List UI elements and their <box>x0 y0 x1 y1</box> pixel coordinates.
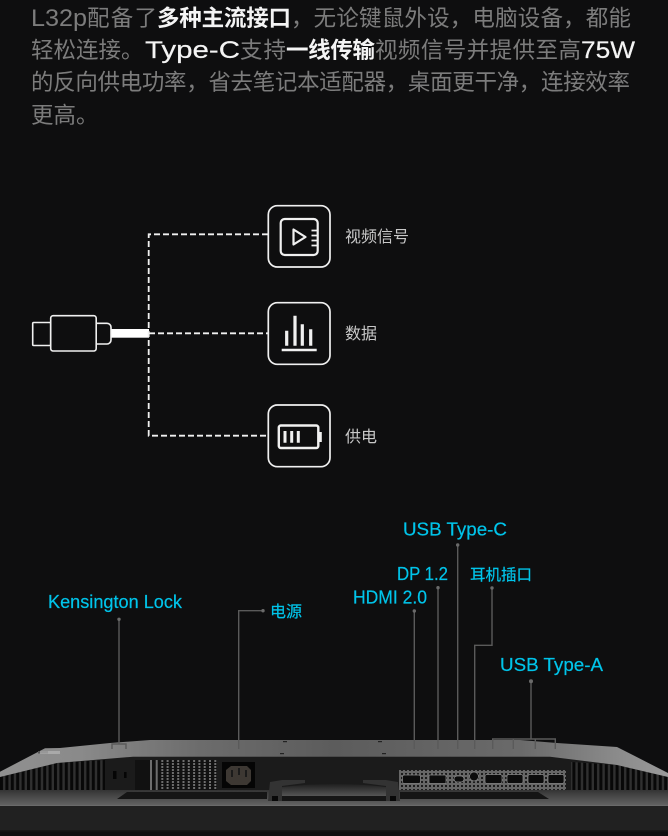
leader lines <box>112 545 555 749</box>
leader: headphone <box>475 588 492 749</box>
port labels: USB Type-C <box>403 518 507 540</box>
intro paragraph: 的反向供电功率，省去笔记本适配器，桌面更干净，连接效率 <box>31 70 630 95</box>
intro paragraph <box>31 5 635 128</box>
port labels: 耳机插口 <box>470 566 532 584</box>
intro paragraph: 多种主流接口 <box>157 6 291 31</box>
cable <box>112 329 149 338</box>
leader end dots <box>117 543 533 683</box>
intro paragraph: 一线传输 <box>286 38 375 63</box>
intro paragraph: 配备了 <box>87 6 157 31</box>
monitor rear lower body <box>0 805 668 830</box>
centre vents <box>135 760 217 790</box>
dashed connectors <box>149 234 268 436</box>
intro paragraph: 视频信号并提供至高 <box>375 38 581 63</box>
port panel <box>399 770 566 790</box>
label: data: 数据 <box>345 325 377 343</box>
small marks <box>38 741 386 754</box>
intro paragraph: 75W <box>581 37 635 64</box>
monitor rear band <box>0 790 668 805</box>
stand <box>268 780 400 801</box>
port labels: 电源 <box>270 603 302 621</box>
left vents <box>0 760 105 790</box>
label: power: 供电 <box>345 428 377 446</box>
port labels: HDMI 2.0 <box>353 586 427 608</box>
intro paragraph: L32p <box>31 5 87 32</box>
monitor dark face <box>0 757 668 790</box>
port labels <box>48 518 604 675</box>
diagram: type-c connector <box>33 316 111 351</box>
leader: hdmi <box>413 611 415 749</box>
intro paragraph: 更高。 <box>31 103 99 128</box>
label: video signal: 视频信号 <box>345 228 409 246</box>
lock slots <box>113 771 127 779</box>
monitor back <box>0 740 668 832</box>
power socket <box>222 762 255 788</box>
port labels: Kensington Lock <box>48 591 183 612</box>
leader: power <box>239 611 263 749</box>
icon: power <box>268 405 330 467</box>
intro paragraph: 轻松连接。 <box>31 38 144 63</box>
port labels: USB Type-A <box>500 654 604 675</box>
leader: dp <box>437 588 439 749</box>
intro paragraph: 支持 <box>240 38 286 63</box>
intro paragraph: Type-C <box>145 37 240 64</box>
port labels: DP 1.2 <box>397 563 448 584</box>
icon: video signal <box>268 206 330 267</box>
leader: usb c <box>457 545 459 749</box>
right vents <box>571 762 668 790</box>
intro paragraph: ，无论键鼠外设，电脑设备，都能 <box>291 6 631 31</box>
lower slot trapezoids <box>117 792 267 799</box>
monitor top face <box>0 740 668 777</box>
leader: kensington lock <box>112 619 126 749</box>
icon: data <box>268 303 330 364</box>
leader: usb a <box>493 681 555 749</box>
